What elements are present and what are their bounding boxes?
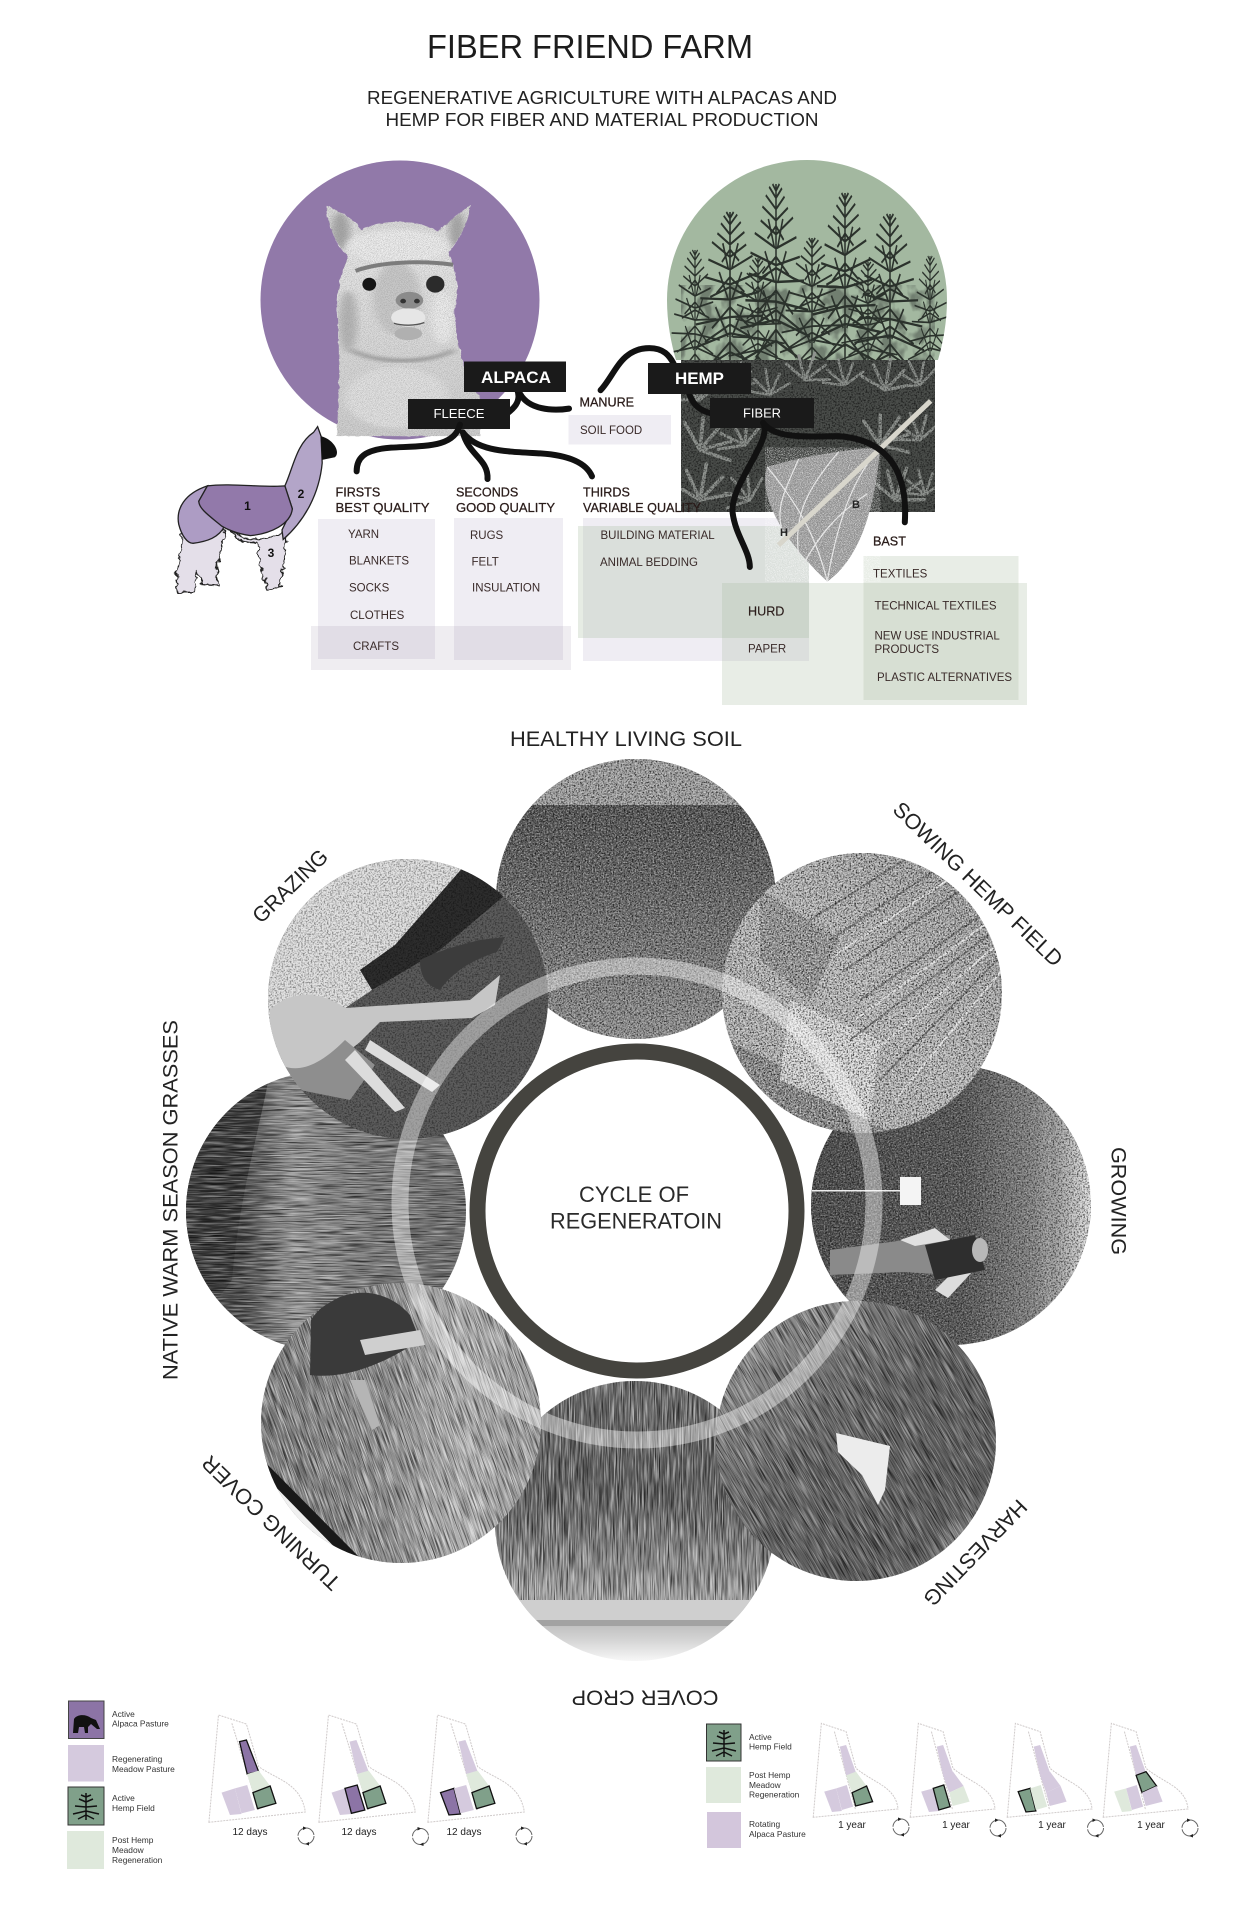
panel: bast box bbox=[864, 556, 1018, 700]
text: hurd uses: PAPER bbox=[748, 644, 786, 656]
labels: fleece diagram numbers: 1 bbox=[244, 499, 251, 513]
connector curves: fleece and fiber branches bbox=[357, 423, 905, 567]
markers: H and B on stalk: B bbox=[852, 499, 860, 511]
panel: alpaca circle bbox=[260, 160, 540, 440]
photo: cover crop bbox=[485, 1380, 785, 1661]
photo: turning cover bbox=[261, 1283, 541, 1563]
text: seconds heading bbox=[456, 486, 556, 515]
site map 2 bbox=[910, 1723, 995, 1817]
text: bast uses: PRODUCTS bbox=[874, 644, 939, 656]
icons: rotation arrows, 1 year bbox=[893, 1818, 1198, 1838]
label: grazing: GRAZING bbox=[248, 845, 333, 928]
panel: building material overlay bbox=[578, 526, 809, 638]
list: firsts uses bbox=[348, 529, 409, 653]
text: thirds heading: THIRDS bbox=[583, 486, 630, 500]
site maps: 12 day rotation bbox=[209, 1715, 524, 1822]
site map 1 bbox=[209, 1715, 305, 1822]
panel: thirds box bbox=[583, 518, 809, 661]
list: firsts uses: BLANKETS bbox=[349, 556, 409, 568]
label: native warm season grasses: NATIVE WARM SEASON GRASSES bbox=[158, 1020, 182, 1380]
duration labels: 1 year: 1 year bbox=[942, 1820, 971, 1831]
title: FIBER FRIEND FARM bbox=[427, 28, 753, 65]
panel: firsts box bbox=[318, 519, 435, 659]
panel: soil food box bbox=[568, 415, 671, 444]
legend text: post hemp meadow: Post Hemp bbox=[749, 1770, 791, 1780]
duration labels: 1 year: 1 year bbox=[1137, 1820, 1166, 1831]
photo: native warm season grasses bbox=[186, 1071, 466, 1351]
text: seconds heading: SECONDS bbox=[456, 486, 518, 500]
label: turning cover: TURNING COVER bbox=[197, 1450, 346, 1595]
legend text: regenerating meadow: Regenerating bbox=[112, 1754, 163, 1764]
duration labels: 12 days: 12 days bbox=[341, 1827, 377, 1838]
legend text: rotating alpaca pasture: Rotating bbox=[749, 1819, 781, 1829]
icons: rotation arrows, 12 days bbox=[298, 1826, 532, 1846]
subtitle: REGENERATIVE AGRICULTURE WITH ALPACAS AND bbox=[367, 88, 837, 108]
legend text: post hemp meadow: Regeneration bbox=[112, 1855, 163, 1865]
panel: hurd and bast overlay bbox=[722, 583, 1027, 705]
legend text: regenerating meadow: Meadow Pasture bbox=[112, 1764, 175, 1774]
panel: hemp arch bbox=[667, 160, 947, 512]
markers: H and B on stalk: H bbox=[780, 527, 788, 539]
subtitle bbox=[367, 88, 837, 130]
photo: sowing hemp field bbox=[722, 853, 1002, 1133]
legend text: active hemp field: Active bbox=[749, 1732, 772, 1742]
list: seconds uses: FELT bbox=[472, 556, 499, 568]
legend text: post hemp meadow: Meadow bbox=[112, 1845, 145, 1855]
legend text: active hemp field: Active bbox=[112, 1793, 135, 1803]
photo: harvesting bbox=[716, 1301, 996, 1581]
duration labels: 1 year bbox=[838, 1820, 1166, 1831]
panel: seconds box bbox=[454, 518, 563, 660]
label box: hemp: HEMP bbox=[675, 369, 724, 388]
label: healthy living soil: HEALTHY LIVING SOIL bbox=[510, 727, 742, 751]
label box: alpaca bbox=[464, 362, 566, 392]
photo: hemp stalk bundle bbox=[765, 401, 931, 582]
legend text: active alpaca pasture: Alpaca Pasture bbox=[112, 1718, 169, 1728]
label box: fleece bbox=[408, 399, 510, 429]
legend swatch: regenerating meadow bbox=[68, 1745, 104, 1782]
site map 3 bbox=[1007, 1723, 1092, 1817]
photo: growing bbox=[811, 1065, 1091, 1345]
markers: H and B on stalk bbox=[780, 499, 860, 539]
ring: translucent cycle ring bbox=[400, 966, 874, 1440]
text: manure: MANURE bbox=[580, 396, 634, 410]
label: sowing hemp field: SOWING HEMP FIELD bbox=[888, 797, 1067, 971]
duration labels: 1 year: 1 year bbox=[838, 1820, 867, 1831]
text: bast uses bbox=[873, 534, 1012, 684]
site map 2 bbox=[319, 1715, 415, 1822]
list: firsts uses: CLOTHES bbox=[350, 610, 405, 622]
label box: alpaca: ALPACA bbox=[481, 368, 551, 387]
duration labels: 12 days: 12 days bbox=[232, 1827, 268, 1838]
legend text: post hemp meadow: Meadow bbox=[749, 1780, 782, 1790]
list: seconds uses: INSULATION bbox=[472, 582, 540, 594]
legend swatch: active hemp field bbox=[68, 1787, 104, 1825]
photo: healthy living soil bbox=[496, 759, 776, 1039]
list: seconds uses: RUGS bbox=[470, 530, 504, 542]
site map 3 bbox=[428, 1715, 524, 1822]
text: hurd uses: HURD bbox=[748, 604, 784, 618]
text: cycle center bbox=[550, 1182, 722, 1234]
list: thirds uses bbox=[600, 530, 715, 569]
duration labels: 1 year: 1 year bbox=[1038, 1820, 1067, 1831]
text: seconds heading: GOOD QUALITY bbox=[456, 501, 556, 515]
list: seconds uses bbox=[470, 530, 540, 594]
label box: hemp bbox=[648, 363, 751, 394]
text: cycle center: REGENERATOIN bbox=[550, 1208, 722, 1234]
label: cover crop: COVER CROP bbox=[572, 1686, 718, 1710]
label: harvesting: HARVESTING bbox=[919, 1495, 1032, 1611]
text: soil food: SOIL FOOD bbox=[580, 425, 642, 437]
site map 1 bbox=[813, 1723, 898, 1817]
label box: fiber bbox=[710, 398, 814, 428]
site maps: 1 year rotation bbox=[813, 1723, 1188, 1817]
legend text: active hemp field: Hemp Field bbox=[112, 1803, 155, 1813]
list: firsts uses: CRAFTS bbox=[353, 641, 399, 653]
duration labels: 12 days bbox=[232, 1827, 482, 1838]
text: hurd uses bbox=[748, 604, 786, 656]
text: bast uses: TECHNICAL TEXTILES bbox=[874, 600, 997, 612]
labels: fleece diagram numbers: 2 bbox=[298, 487, 305, 501]
text: cycle center: CYCLE OF bbox=[579, 1182, 689, 1207]
list: thirds uses: ANIMAL BEDDING bbox=[600, 557, 698, 569]
connector curves bbox=[503, 348, 724, 417]
label: growing: GROWING bbox=[1106, 1147, 1130, 1255]
panel: alpaca fleece diagram bbox=[176, 425, 337, 592]
legend swatch: active hemp field bbox=[706, 1724, 741, 1761]
ring: central dark ring bbox=[478, 1052, 796, 1370]
subtitle: HEMP FOR FIBER AND MATERIAL PRODUCTION bbox=[386, 110, 818, 130]
legend text: active hemp field: Hemp Field bbox=[749, 1742, 792, 1752]
duration labels: 12 days: 12 days bbox=[446, 1827, 482, 1838]
list: thirds uses: BUILDING MATERIAL bbox=[600, 530, 715, 542]
labels: fleece diagram numbers bbox=[244, 487, 305, 560]
text: bast uses: BAST bbox=[873, 534, 906, 548]
text: firsts heading: BEST QUALITY bbox=[336, 501, 430, 515]
list: firsts uses: SOCKS bbox=[349, 582, 390, 594]
legend swatch: post hemp meadow bbox=[67, 1831, 104, 1869]
legend text: active alpaca pasture: Active bbox=[112, 1709, 135, 1719]
photo: alpaca head bbox=[322, 203, 489, 440]
list: firsts uses: YARN bbox=[348, 529, 379, 541]
text: bast uses: NEW USE INDUSTRIAL bbox=[874, 630, 1000, 642]
text: bast uses: PLASTIC ALTERNATIVES bbox=[877, 672, 1012, 684]
legend swatch: rotating alpaca pasture bbox=[707, 1812, 741, 1848]
text: firsts heading bbox=[336, 486, 430, 515]
text: bast uses: TEXTILES bbox=[873, 568, 928, 580]
photo: hemp field bbox=[666, 184, 954, 515]
legend: alpaca rotation bbox=[67, 1701, 175, 1869]
legend: hemp rotation bbox=[706, 1724, 806, 1848]
site map 4 bbox=[1103, 1723, 1188, 1817]
legend text: rotating alpaca pasture: Alpaca Pasture bbox=[749, 1829, 806, 1839]
legend swatch: active alpaca pasture bbox=[68, 1701, 104, 1738]
text: firsts heading: FIRSTS bbox=[336, 486, 380, 500]
labels: fleece diagram numbers: 3 bbox=[268, 546, 275, 560]
label box: fleece: FLEECE bbox=[434, 406, 485, 421]
photo: grazing bbox=[268, 859, 548, 1139]
text: thirds heading bbox=[583, 486, 702, 515]
band: crafts overlay bbox=[311, 626, 571, 670]
legend text: post hemp meadow: Regeneration bbox=[749, 1790, 800, 1800]
legend text: post hemp meadow: Post Hemp bbox=[112, 1835, 154, 1845]
text: thirds heading: VARIABLE QUALITY bbox=[583, 501, 702, 515]
label box: fiber: FIBER bbox=[743, 406, 781, 420]
legend swatch: post hemp meadow bbox=[706, 1767, 741, 1803]
